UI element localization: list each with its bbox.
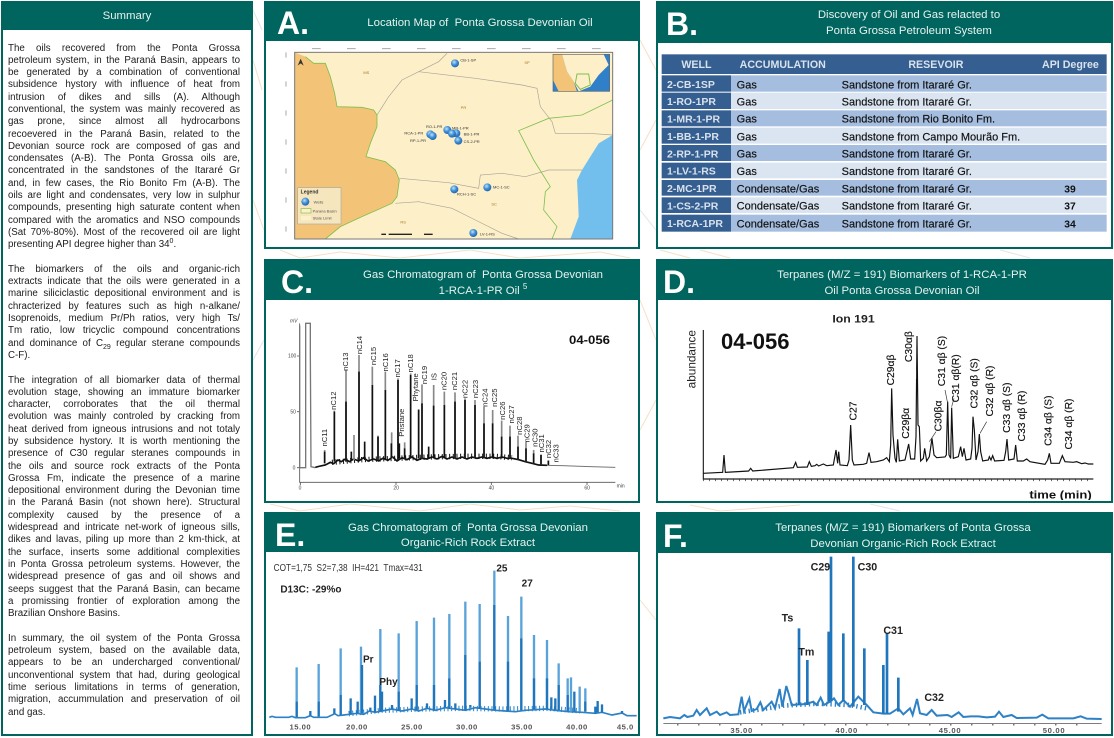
text block: conclusion paragraph: unconventional system that had, during geological — [8, 670, 240, 681]
text block: oil composition paragraph: condensates (A-B). The Ponta Grossa oils are, — [8, 153, 240, 164]
text block: thermal evolution paragraph: Brazilian Onshore Basins. — [8, 608, 120, 619]
chart: gas chromatogram of rock extract — [269, 563, 637, 731]
peak labels: C27 — [848, 401, 860, 420]
well and state labels: LV-1-RS — [480, 231, 495, 236]
text block: thermal evolution paragraph: widespread and intricate net-work of igneous sills, — [8, 522, 240, 533]
peak labels: nC23 — [471, 380, 480, 398]
x axis scale: 25.00 — [401, 722, 423, 731]
heading: discovery title: Discovery of Oil and Gas relacted to — [818, 9, 1000, 21]
axes — [703, 330, 1093, 479]
peak labels: C32 αβ (R) — [985, 366, 996, 416]
trace — [703, 336, 1093, 473]
map: Paraná Basin well locations — [286, 48, 614, 240]
peak labels: Tm — [798, 647, 814, 659]
peak labels: C30αβ — [904, 331, 915, 362]
peak labels: C32 αβ (S) — [970, 358, 980, 409]
peak labels: nC11 — [320, 429, 329, 447]
peak labels: nC24 — [480, 388, 490, 407]
light peak tops — [297, 571, 585, 717]
heading: terpanes title: Oil Ponta Grossa Devonian Oil — [824, 284, 980, 296]
well names — [667, 79, 723, 230]
peak labels: Pristane — [397, 409, 406, 437]
peak labels: nC27 — [507, 405, 516, 423]
table: wells, accumulation, reservoir, API degree — [662, 54, 1107, 232]
peak labels: nC22 — [460, 380, 470, 398]
text block: oil composition paragraph: presenting API degree higher than 340. — [8, 238, 176, 250]
x axis scale: 35.00 — [511, 722, 533, 731]
well names: 1-MR-1-PR — [667, 113, 721, 125]
peak labels: C34 αβ (R) — [1064, 399, 1075, 449]
text block: thermal evolution paragraph: The integration of all biomarker data of thermal — [8, 375, 240, 386]
peak labels: nC25 — [490, 389, 499, 407]
peak labels: C29αβ — [886, 355, 897, 385]
text block: thermal evolution paragraph: seeps suggest that the Paraná Basin, can became — [8, 584, 240, 595]
text block: thermal evolution paragraph: heat derived from igneous intrusions and not totaly — [8, 424, 240, 435]
text block: conclusion paragraph: petroleum system, based on the available data, — [8, 645, 240, 656]
panel letter F: F. — [663, 518, 688, 554]
inset: location in South America — [553, 54, 610, 91]
heading: extract chromatogram title: Organic-Rich Rock Extract — [401, 537, 535, 549]
axis labels: 0 — [299, 485, 302, 491]
accumulation types: Condensate/Gas — [737, 183, 820, 195]
panel F: rock extract terpane biomarkers — [656, 512, 1113, 736]
text block: biomarkers paragraph — [8, 264, 240, 361]
peak labels: nC13 — [341, 353, 350, 371]
axis labels: 40 — [489, 485, 494, 491]
text block: oil composition paragraph: compounds, presenting high saturate content when — [8, 202, 240, 213]
axes — [297, 323, 615, 485]
text block: biomarkers paragraph: marine siliciclastic depositional environment and is — [8, 288, 240, 299]
heading: panel D header band — [656, 259, 1113, 300]
text block: conclusion paragraph: migration, accummulation and preservation of oil — [8, 694, 240, 705]
text block: biomarkers paragraph: Isoprenoids, medium Pr/Ph ratios, very high Ts/ — [8, 313, 240, 324]
accumulation types: Gas — [737, 131, 757, 143]
north arrow — [298, 59, 304, 66]
well and state labels: MS — [363, 70, 370, 75]
well names: 1-RO-1PR — [667, 96, 716, 108]
text block: thermal evolution paragraph: in the Paraná Basin (not shown here). Structural — [8, 497, 240, 508]
table header row — [662, 54, 1107, 74]
well names: 1-RCA-1PR — [667, 218, 723, 230]
x axis scale: 30.00 — [456, 722, 478, 731]
well and state labels: CB-1-SP — [460, 58, 476, 63]
accumulation types: Gas — [737, 79, 757, 91]
reservoir names: Sandstone from Itararé Gr. — [842, 79, 972, 91]
text block: oil composition paragraph: gas prone, since almost all hydrocarbons — [8, 116, 240, 127]
peak labels: C31 αβ (S) — [937, 336, 948, 386]
table row stripes — [731, 75, 1107, 232]
text block: oil composition paragraph: and, in few cases, the Rio Bonito Fm (A-B). The — [8, 178, 240, 189]
reservoir names: Sandstone from Itararé Gr. — [842, 183, 972, 195]
peak labels: nC21 — [450, 372, 459, 390]
table header row: API Degree — [1042, 59, 1099, 71]
text block: oil composition paragraph: oils are light and condensates, very low in sulphur — [8, 190, 240, 201]
peak labels: 25 — [496, 564, 508, 575]
peak labels: IS — [430, 373, 438, 380]
text block: oil composition paragraph: (Sat 70%-80%). Most of the recovered oil are light — [8, 227, 240, 238]
heading: panel B header band — [656, 1, 1113, 43]
peak labels: nC29 — [522, 424, 532, 442]
text block: biomarkers paragraph: extracts indicate that the oils were generated in a — [8, 276, 240, 287]
x axis scale: 40.00 — [566, 722, 588, 731]
peak labels: C33 αβ (S) — [1002, 382, 1013, 433]
accumulation types: Gas — [737, 166, 757, 178]
heading: discovery title: Ponta Grossa Petroleum System — [826, 24, 992, 36]
text block: conclusion paragraph: In summary, the oil system of the Ponta Grossa — [8, 633, 240, 644]
text block: thermal evolution paragraph: character, corroborates that the oil thermal — [8, 399, 240, 410]
map legend: State Limit — [313, 216, 332, 221]
reservoir names: Sandstone from Rio Bonito Fm. — [842, 114, 995, 126]
heading: terpanes title — [777, 269, 1027, 296]
panel C: oil gas chromatogram — [264, 259, 640, 503]
x axis scale: 50.00 — [1043, 726, 1065, 735]
chart: terpane biomarkers ion 191: 04-056 — [721, 329, 790, 354]
well markers — [426, 59, 491, 237]
x axis scale: 40.00 — [835, 726, 858, 735]
well names: 2-RP-1-PR — [667, 148, 719, 160]
peak labels: C30βα — [934, 401, 944, 431]
heading: panel E header band — [264, 512, 640, 552]
peak labels: nC32 — [544, 440, 553, 458]
text block: thermal evolution paragraph: widespread presence of gas and oil shows and — [8, 571, 240, 582]
well names: 1-LV-1-RS — [667, 166, 716, 178]
peak labels: nC30 — [530, 429, 540, 447]
peak labels: nC26 — [498, 402, 507, 420]
peak labels: nC33 — [552, 444, 560, 462]
peak labels: C33 αβ (R) — [1017, 391, 1028, 441]
accumulation types: Gas — [737, 96, 757, 108]
peaks — [325, 355, 548, 465]
well and state labels: SC — [491, 202, 497, 207]
peak labels: C30 — [858, 562, 877, 574]
heading: panel C header band — [264, 259, 640, 300]
peak labels: C34 αβ (S) — [1044, 395, 1054, 446]
panel A: location map — [264, 1, 640, 249]
text block: oil composition paragraph: intrusion of dikes and sills (A). Although — [8, 92, 240, 103]
well and state labels: SP — [524, 60, 530, 65]
axis labels — [288, 319, 625, 491]
text block: conclusion paragraph: and gas. — [8, 707, 45, 718]
reservoir names: Sandstone from Campo Mourão Fm. — [842, 131, 1020, 143]
heading: extract chromatogram title: Gas Chromatogram of Ponta Grossa Devonian — [348, 522, 588, 534]
heading: terpanes title: Terpanes (M/Z = 191) Biomarkers of 1-RCA-1-PR — [777, 269, 1027, 281]
axis labels: min — [617, 484, 625, 490]
heading: extract terpanes title: Devonian Organic-Rich Rock Extract — [810, 538, 996, 550]
map legend: Legend — [301, 190, 318, 196]
table header row: RESEVOIR — [908, 59, 964, 71]
well names: 2-MC-1PR — [667, 183, 717, 195]
well and state labels: RO-1-PR — [426, 124, 443, 129]
heading: chromatogram title: Gas Chromatogram of Ponta Grossa Devonian — [363, 269, 603, 281]
x axis — [663, 723, 1102, 725]
API degree values: 37 — [1064, 202, 1076, 213]
peak labels: nC17 — [393, 359, 402, 377]
panel letter B: B. — [666, 6, 698, 42]
text block: biomarkers paragraph: Tm ratio, low tricyclic compound concentrations — [8, 325, 240, 336]
carbon isotope text: D13C: -29%o — [280, 585, 341, 596]
x axis scale: 15.00 — [289, 722, 311, 731]
peak labels: nC15 — [369, 347, 378, 365]
peak labels: nC18 — [406, 354, 415, 372]
map legend: Parana Basin — [313, 208, 337, 213]
API degree values: 34 — [1064, 219, 1076, 230]
text block: thermal evolution paragraph: a promissing frontier of exploration among the — [8, 596, 240, 607]
text block: thermal evolution paragraph: the oils and source rock extracts of the Ponta — [8, 461, 240, 472]
well names: 2-CB-1SP — [667, 79, 715, 91]
text block: oil composition paragraph: be generated by a combination of conventional — [8, 67, 240, 78]
baseline noise — [349, 708, 582, 714]
panel E: rock extract gas chromatogram — [264, 512, 640, 736]
text block: thermal evolution paragraph: the surface, inserts some additional complexities — [8, 547, 240, 558]
well and state labels: MC-1-SC — [493, 184, 510, 189]
scale bar — [381, 232, 433, 236]
accumulation types: Condensate/Gas — [737, 218, 820, 230]
heading: chromatogram title — [363, 269, 603, 296]
peak labels: nC14 — [355, 335, 364, 354]
well names: 1-CS-2-PR — [667, 200, 719, 212]
x axis scale: 35.00 — [730, 726, 753, 735]
text block: biomarkers paragraph: The biomarkers of the oils and organic-rich — [8, 264, 240, 275]
panel letter E: E. — [275, 517, 305, 553]
panel letter C: C. — [281, 264, 313, 300]
axis captions: Ion 191 — [832, 314, 875, 326]
text block: thermal evolution paragraph — [8, 375, 240, 619]
heading: discovery title — [818, 9, 1000, 36]
text block: oil composition paragraph: The oils recovered from the Ponta Grossa — [8, 42, 240, 54]
API degree values: 39 — [1064, 184, 1076, 195]
peak labels: Pr — [363, 655, 374, 666]
heading: extract terpanes title: Terpanes (M/Z = 191) Biomarkers of Ponta Grossa — [775, 522, 1031, 534]
axis labels: 20 — [393, 485, 399, 491]
well and state labels: RP-1-PR — [410, 138, 426, 143]
text block: thermal evolution paragraph: presence of C30 regular steranes compounds in — [8, 448, 240, 459]
peak labels: 27 — [522, 579, 533, 590]
peak labels: nC31 — [537, 434, 546, 452]
heading: location map title: Location Map of Ponta Grossa Devonian Oil — [367, 17, 593, 29]
x axis scale: 45.0 — [617, 722, 634, 731]
chart: terpane biomarkers ion 191: abundance — [686, 330, 699, 388]
text block: biomarkers paragraph: and dominance of C29 regular sterane compounds — [8, 338, 240, 351]
baseline hump — [315, 456, 547, 467]
well names: 1-BB-1-PR — [667, 131, 719, 143]
well and state labels: PR — [461, 105, 466, 110]
text block: oil composition paragraph: compared with the aromatics and NSO compounds — [8, 215, 240, 226]
x axis scale — [289, 722, 634, 731]
peak labels: Phytane — [411, 373, 420, 401]
peak labels: nC12 — [329, 392, 338, 410]
leader lines — [917, 370, 987, 442]
panel D: oil terpane biomarkers — [656, 259, 1113, 503]
well and state labels: RCH-1-SC — [457, 191, 476, 196]
text block: summary body — [8, 42, 240, 718]
baseline trace — [269, 708, 637, 718]
heading: panel A header band — [264, 1, 640, 41]
accumulation types — [737, 79, 820, 230]
table header row: WELL — [681, 59, 712, 71]
peak labels: C32 — [924, 692, 944, 704]
accumulation types: Gas — [737, 114, 757, 126]
chart: terpane biomarkers of rock extract — [663, 556, 1102, 735]
heading: chromatogram title: 1-RCA-1-PR Oil 5 — [439, 282, 527, 296]
heading: summary — [1, 1, 253, 30]
text block: thermal evolution paragraph: depositional environment during the Devonian time — [8, 485, 240, 496]
reservoir names: Sandstone from Itararé Gr. — [842, 96, 972, 108]
well and state labels — [363, 58, 530, 236]
sample label: 04-056 — [569, 333, 610, 347]
well and state labels: BB-1-PR — [464, 132, 480, 137]
axis labels: 50 — [290, 409, 296, 415]
text block: oil composition paragraph: conventional, the system was mainly recovered as — [8, 104, 240, 115]
dark peak bases — [297, 605, 622, 717]
text block: conclusion paragraph — [8, 633, 240, 718]
text block: biomarkers paragraph: C-F). — [8, 350, 30, 361]
heading: extract chromatogram title — [348, 522, 588, 549]
panel letter D: D. — [663, 264, 695, 300]
solvent peak — [300, 323, 315, 468]
peak labels: Phy — [379, 677, 398, 688]
API degree values — [1064, 184, 1076, 230]
peak labels: C29 — [811, 562, 830, 574]
reservoir names: Sandstone from Itararé Gr. — [842, 201, 972, 213]
peaks — [799, 557, 898, 714]
well and state labels: RS — [400, 220, 406, 225]
map legend — [298, 188, 341, 224]
x axis scale — [730, 726, 1065, 735]
text block: oil composition paragraph: petroleum system, in the Paraná Basin, appears to — [8, 55, 240, 66]
axis labels: mV — [290, 319, 298, 325]
baseline noise — [740, 704, 867, 712]
text block: biomarkers paragraph: chracterized by features such as high n-alkane/ — [8, 301, 240, 312]
accumulation types: Gas — [737, 149, 757, 161]
chart: gas chromatogram of oil — [288, 318, 625, 491]
axis labels: 100 — [288, 354, 297, 360]
map legend: Wells — [314, 200, 323, 205]
peak labels: nC28 — [515, 417, 524, 435]
text block: oil composition paragraph: recoevered in the Paraná Basin, related to the — [8, 129, 240, 140]
text block: thermal evolution paragraph: complexity caused by the presence of a — [8, 510, 240, 521]
text block: oil composition paragraph: subsidence hystory with influence of heat from — [8, 79, 240, 90]
heading: panel F header band — [656, 512, 1113, 553]
text block: thermal evolution paragraph: dikes and lavas, piling up more than 2 km-thick, at — [8, 534, 240, 545]
well and state labels: MR-1-PR — [452, 126, 469, 131]
table header row: ACCUMULATION — [740, 59, 826, 71]
peak labels — [848, 331, 1075, 449]
baseline noise — [332, 456, 512, 462]
x axis scale: 45.00 — [939, 726, 961, 735]
well and state labels: CS-2-PR — [464, 139, 480, 144]
text block: thermal evolution paragraph: evolution was mainly controled by cracking from — [8, 411, 240, 422]
axis labels: 60 — [584, 485, 590, 491]
text block: thermal evolution paragraph: Grossa Fm, indicate the presence of a marine — [8, 473, 240, 484]
sample data text: COT=1,75 S2=7,38 IH=421 Tmax=431 — [274, 563, 423, 574]
heading: summary: Summary — [103, 10, 151, 22]
heading: extract terpanes title — [775, 522, 1031, 550]
text block: oil composition paragraph: Devonian source rock are composed of gas and — [8, 141, 240, 152]
peak labels: C31 αβ(R) — [951, 354, 962, 402]
chart: terpane biomarkers ion 191 — [686, 314, 1094, 500]
axis labels: 0 — [293, 465, 296, 471]
text block: conclusion paragraph: appears to be an undercharged conventional/ — [8, 657, 240, 668]
peak labels: nC16 — [381, 353, 390, 371]
reservoir names: Sandstone from Itararé Gr. — [842, 149, 972, 161]
peak labels: C29βα — [901, 408, 912, 439]
panel letter A: A. — [277, 5, 309, 41]
reservoir names: Sandstone from Itararé Gr. — [842, 166, 972, 178]
text block: conclusion paragraph: time serious limitations in terms of generation, — [8, 682, 240, 693]
accumulation types: Condensate/Gas — [737, 201, 820, 213]
peak labels — [782, 562, 944, 704]
peak labels: nC19 — [420, 366, 429, 384]
panel B: discoveries table — [656, 1, 1113, 249]
text block: thermal evolution paragraph: by subsidence hystory. It is worth mentioning the — [8, 436, 240, 447]
well and state labels: RCA-1-PR — [404, 130, 423, 135]
peak labels — [320, 335, 560, 462]
panel: summary — [1, 1, 253, 736]
peak labels: Ts — [782, 613, 793, 625]
text block: thermal evolution paragraph: evolution stage, showing an immature biomarker — [8, 387, 240, 398]
text block: oil composition paragraph — [8, 42, 240, 250]
peak labels — [363, 564, 533, 688]
peak labels: C31 — [883, 625, 903, 637]
reservoir names: Sandstone from Itararé Gr. — [842, 218, 972, 230]
x axis scale: 20.00 — [346, 722, 368, 731]
reservoir names — [842, 79, 1020, 230]
trace — [663, 686, 1102, 719]
peak labels: nC20 — [440, 372, 448, 390]
text block: thermal evolution paragraph: in Ponta Grossa petroleum systems. However, the — [8, 559, 240, 570]
text block: oil composition paragraph: concentrated in the sandstones of the Itararé Gr — [8, 165, 240, 176]
